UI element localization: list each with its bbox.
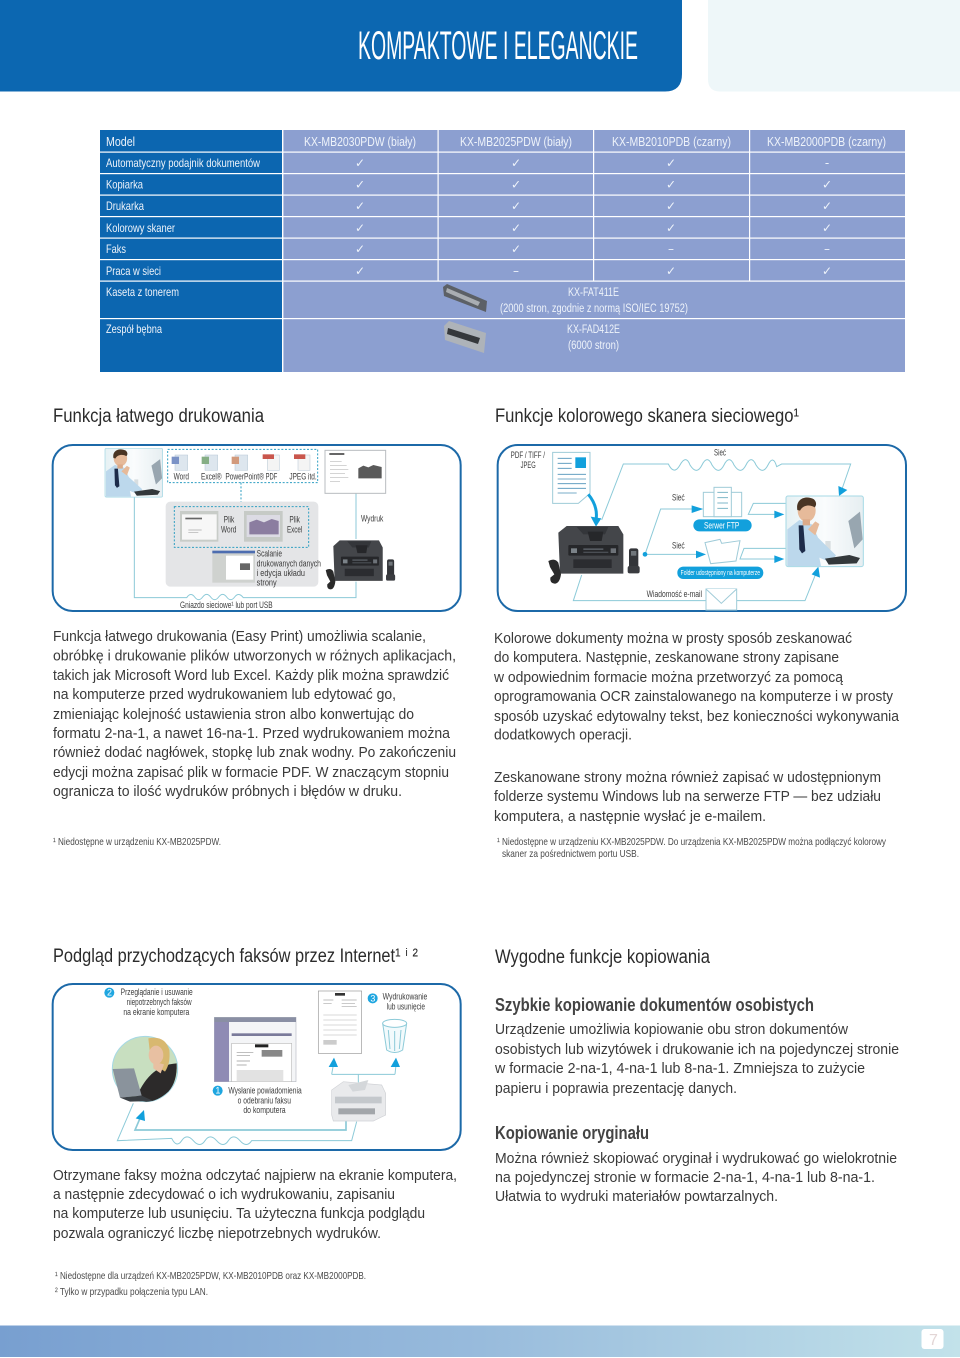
step 3 label: [368, 991, 427, 1011]
excel file label: [287, 515, 302, 534]
comparison table: [100, 130, 905, 372]
table feature marks: ✓: [355, 199, 365, 213]
merge text: Scalanie: [257, 549, 282, 559]
table row labels: Drukarka: [106, 199, 144, 213]
header light panel: [708, 0, 960, 92]
toner text: KX-FAT411E: [568, 287, 619, 299]
printer: [548, 526, 640, 584]
panel: easy print diagram: [53, 445, 461, 611]
network labels: [672, 448, 726, 551]
dotted box: file types: PDF: [266, 471, 278, 481]
easy print text: formatu 2-na-1, a nawet 16-na-1. Przed wydrukowaniem można: [53, 725, 451, 742]
scanner text: w odpowiednim formacie można przetworzyć za pomocą: [493, 669, 843, 686]
table feature marks: –: [668, 242, 674, 256]
dotted box: file types: JPEG itd.: [289, 471, 317, 481]
table feature marks: ✓: [822, 178, 832, 192]
internet fax text: a następnie zdecydować o ich wydrukowaniu, zapisaniu: [53, 1186, 395, 1203]
arrowheads: [136, 1058, 400, 1121]
excel file label: Plik: [289, 515, 300, 525]
merge text: strony: [257, 578, 277, 588]
personal documents text: osobistych lub wizytówek i drukowanie ich na pojedynczej stronie: [495, 1041, 899, 1058]
footnotes: internet fax: ² Tylko w przypadku połączenia typu LAN.: [55, 1287, 208, 1298]
easy print text: [53, 628, 456, 800]
icon: toner cartridge: [443, 284, 487, 312]
screenshot: fax preview: [214, 1017, 296, 1082]
table feature marks: ✓: [666, 264, 676, 278]
table feature marks: ✓: [511, 221, 521, 235]
footer bar: [0, 1326, 960, 1357]
layout editor thumbnail: [212, 551, 255, 583]
icon: shared folder: [705, 539, 740, 564]
toner text: (2000 stron, zgodnie z normą ISO/IEC 19752): [500, 303, 688, 315]
email label: Wiadomość e-mail: [647, 589, 702, 599]
network labels: Sieć: [672, 541, 685, 551]
icon: drum unit: [444, 321, 486, 353]
table feature marks: –: [824, 242, 830, 256]
toner text: [500, 287, 688, 315]
footnotes: internet fax: ¹ Niedostępne dla urządzeń KX-MB2025PDW, KX-MB2010PDB oraz KX-MB2000PDB.: [55, 1271, 366, 1282]
dotted box: file types: PowerPoint®: [225, 471, 264, 481]
fax lines: [117, 1065, 396, 1144]
scanner text: dodatkowych operacji.: [494, 726, 632, 744]
page number: 7: [929, 1332, 938, 1349]
step 2 label: [104, 987, 193, 1017]
icon: envelope: [706, 589, 737, 610]
subheading: original copy: Kopiowanie oryginału: [495, 1122, 649, 1143]
merge text: [257, 549, 321, 588]
white printer: [332, 1080, 386, 1121]
footnotes: internet fax: [55, 1271, 366, 1298]
connection label: Gniazdo sieciowe¹ lub port USB: [180, 600, 273, 610]
table feature marks: ✓: [511, 178, 521, 192]
easy print text: takich jak Microsoft Word lub Excel. Każdy plik można sprawdzić: [53, 667, 449, 684]
table feature marks: ✓: [355, 242, 365, 256]
table feature marks: ✓: [355, 221, 365, 235]
step 3 label: Wydrukowanie: [383, 991, 427, 1001]
table feature marks: ✓: [666, 199, 676, 213]
heading: copy functions: Wygodne funkcje kopiowania: [495, 947, 710, 968]
scan arrow: [588, 494, 601, 527]
gray edit block: [166, 502, 321, 588]
step 2 label: Przeglądanie i usuwanie: [121, 987, 193, 997]
dotted box: file types: Word: [174, 471, 189, 481]
step 1 label: 1: [215, 1086, 220, 1096]
scanner text: folderze systemu Windows lub na serwerze FTP — bez udziału: [494, 788, 881, 805]
table row labels: Kopiarka: [106, 178, 143, 192]
word file label: Plik: [224, 515, 235, 525]
word file label: [221, 515, 236, 534]
table row labels: Zespół bębna: [106, 322, 162, 336]
original copy text: Można również skopiować oryginał i wydrukować go wielokrotnie: [495, 1150, 897, 1167]
table row labels: [106, 135, 260, 336]
table feature marks: -: [825, 156, 829, 170]
word file label: Word: [221, 524, 236, 534]
scanner text: komputera, a następnie wysłać je e-mailem.: [494, 808, 766, 825]
table feature marks: ✓: [666, 221, 676, 235]
easy print text: ogranicza to ilość wydruków próbnych i błędów w druku.: [53, 783, 402, 800]
network labels: Sieć: [672, 492, 685, 502]
icon: trash bin: [383, 1019, 407, 1052]
page number: [922, 1329, 944, 1349]
step 1 label: o odebraniu faksu: [238, 1095, 291, 1105]
table model headers: [304, 135, 886, 149]
table feature marks: ✓: [822, 264, 832, 278]
user photo: [105, 448, 163, 497]
merge text: drukowanych danych: [257, 558, 321, 568]
network lines: [573, 460, 851, 601]
header banner: [0, 0, 682, 92]
table model headers: KX-MB2025PDW (biały): [460, 135, 572, 149]
scanner text: oprogramowania OCR zainstalowanego na komputerze i w prosty: [494, 688, 893, 705]
scanner text: Kolorowe dokumenty można w prosty sposób zeskanować: [494, 630, 852, 647]
header banner: KOMPAKTOWE I ELEGANCKIE: [358, 24, 638, 68]
table feature marks: ✓: [355, 156, 365, 170]
footnote: easy print: ¹ Niedostępne w urządzeniu KX-MB2025PDW.: [53, 837, 221, 848]
table row labels: Kolorowy skaner: [106, 221, 175, 235]
network labels: Sieć: [714, 448, 726, 458]
table feature marks: ✓: [355, 264, 365, 278]
ftp server pill: [693, 519, 752, 531]
shared folder pill: Folder udostępniony na komputerze: [681, 568, 760, 577]
printed page: [325, 450, 386, 493]
heading: network scanner: Funkcje kolorowego skanera sieciowego¹: [495, 406, 799, 427]
personal documents text: papieru i poprawia prezentację danych.: [495, 1080, 737, 1097]
step 2 label: na ekranie komputera: [123, 1007, 189, 1017]
internet fax text: [53, 1167, 457, 1242]
drum text: (6000 stron): [568, 340, 619, 352]
footnote: scanner: skaner za pośrednictwem portu USB.: [502, 849, 639, 860]
scanner text: Zeskanowane strony można również zapisać w udostępnionym: [494, 769, 881, 786]
step 3 label: 3: [370, 993, 375, 1003]
printer: [326, 540, 395, 589]
easy print text: edycji można zapisać plik w formacie PDF. W znaczącym stopniu: [53, 764, 449, 781]
dotted box: file types: [168, 449, 318, 502]
arrowheads: [643, 486, 847, 578]
original copy text: [495, 1150, 897, 1205]
connection lines: [134, 493, 356, 600]
drum text: KX-FAD412E: [567, 324, 620, 336]
heading: easy print: Funkcja łatwego drukowania: [53, 406, 264, 427]
printout label: Wydruk: [361, 513, 384, 523]
excel file thumbnail: [244, 511, 283, 542]
footnote: scanner: [497, 837, 887, 860]
table feature marks: ✓: [511, 199, 521, 213]
subheading: personal documents: Szybkie kopiowanie dokumentów osobistych: [495, 994, 814, 1015]
merge text: i edycja układu: [257, 568, 305, 578]
table feature marks: ✓: [511, 156, 521, 170]
step 2 label: niepotrzebnych faksów: [127, 997, 192, 1007]
user photo: [786, 496, 863, 567]
printed fax page: [318, 991, 362, 1053]
ftp server pill: Serwer FTP: [704, 521, 739, 531]
table feature marks: ✓: [355, 178, 365, 192]
personal documents text: [494, 1021, 899, 1097]
panel: internet fax diagram: [53, 984, 461, 1150]
dotted box: file types: Excel®: [201, 471, 222, 481]
table row labels: Praca w sieci: [106, 264, 161, 278]
personal documents text: Urządzenie umożliwia kopiowanie obu stron dokumentów: [495, 1021, 848, 1038]
easy print text: obróbkę i drukowanie plików utworzonych w różnych aplikacjach,: [53, 648, 456, 664]
excel file label: Excel: [287, 524, 302, 534]
table model headers: KX-MB2030PDW (biały): [304, 135, 416, 149]
format label: JPEG: [521, 460, 536, 470]
easy print text: również dodać nagłówek, stopkę lub znak wodny. Po zakończeniu: [53, 744, 456, 761]
table row labels: Automatyczny podajnik dokumentów: [106, 156, 260, 170]
internet fax text: na komputerze lub usunięciu. Ta użyteczna funkcja podglądu: [53, 1205, 425, 1222]
heading: internet fax: Podgląd przychodzących faksów przez Internet¹ ⁱ ²: [53, 946, 418, 967]
table feature marks: ✓: [666, 178, 676, 192]
original copy text: Ułatwia to wydruki materiałów powtarzalnych.: [495, 1188, 778, 1205]
scanner text: sposób uzyskać edytowalny tekst, bez konieczności wykonywania: [494, 708, 899, 725]
table feature marks: ✓: [666, 156, 676, 170]
internet fax text: Otrzymane faksy można odczytać najpierw na ekranie komputera,: [53, 1167, 457, 1184]
table model headers: KX-MB2010PDB (czarny): [612, 135, 731, 149]
icon: ftp server: [703, 487, 742, 517]
step 1 label: Wysłanie powiadomienia: [228, 1085, 302, 1095]
table row labels: Model: [106, 135, 135, 149]
personal documents text: w formacie 2-na-1, 4-na-1 lub 8-na-1. Zmniejsza to zużycie: [494, 1060, 865, 1077]
table feature marks: ✓: [822, 221, 832, 235]
original copy text: na pojedynczej stronie w formacie 2-na-1, 4-na-1 lub 8-na-1.: [495, 1169, 875, 1186]
table model headers: KX-MB2000PDB (czarny): [767, 135, 886, 149]
panel: network scanner diagram: [498, 445, 906, 611]
format label: PDF / TIFF /: [511, 450, 545, 460]
word file thumbnail: [180, 511, 218, 542]
internet fax text: pozwala ograniczyć liczbę niepotrzebnych wydruków.: [53, 1225, 381, 1242]
easy print text: na komputerze przed wydrukowaniem lub edytować go,: [53, 686, 396, 703]
step 3 label: lub usunięcie: [387, 1001, 425, 1011]
scanned document: [553, 452, 590, 503]
shared folder pill: [677, 567, 763, 579]
easy print text: Funkcja łatwego drukowania (Easy Print) umożliwia scalanie,: [53, 628, 426, 645]
drum text: [567, 324, 620, 352]
step 2 label: 2: [107, 988, 112, 998]
table feature marks: ✓: [822, 199, 832, 213]
step 1 label: do komputera: [243, 1105, 286, 1115]
table row labels: Faks: [106, 242, 126, 256]
table feature marks: ✓: [511, 242, 521, 256]
scanner text: [493, 630, 899, 825]
step 1 label: [213, 1085, 302, 1115]
easy print text: zmieniając kolejność ustawienia stron albo konwertując do: [53, 706, 414, 723]
format label: [511, 450, 545, 470]
table feature marks: –: [513, 264, 519, 278]
photo: woman at laptop: [112, 1036, 178, 1102]
table feature marks: [355, 156, 832, 278]
table row labels: Kaseta z tonerem: [106, 285, 179, 299]
scanner text: do komputera. Następnie, zeskanowane strony zapisane: [494, 649, 839, 666]
